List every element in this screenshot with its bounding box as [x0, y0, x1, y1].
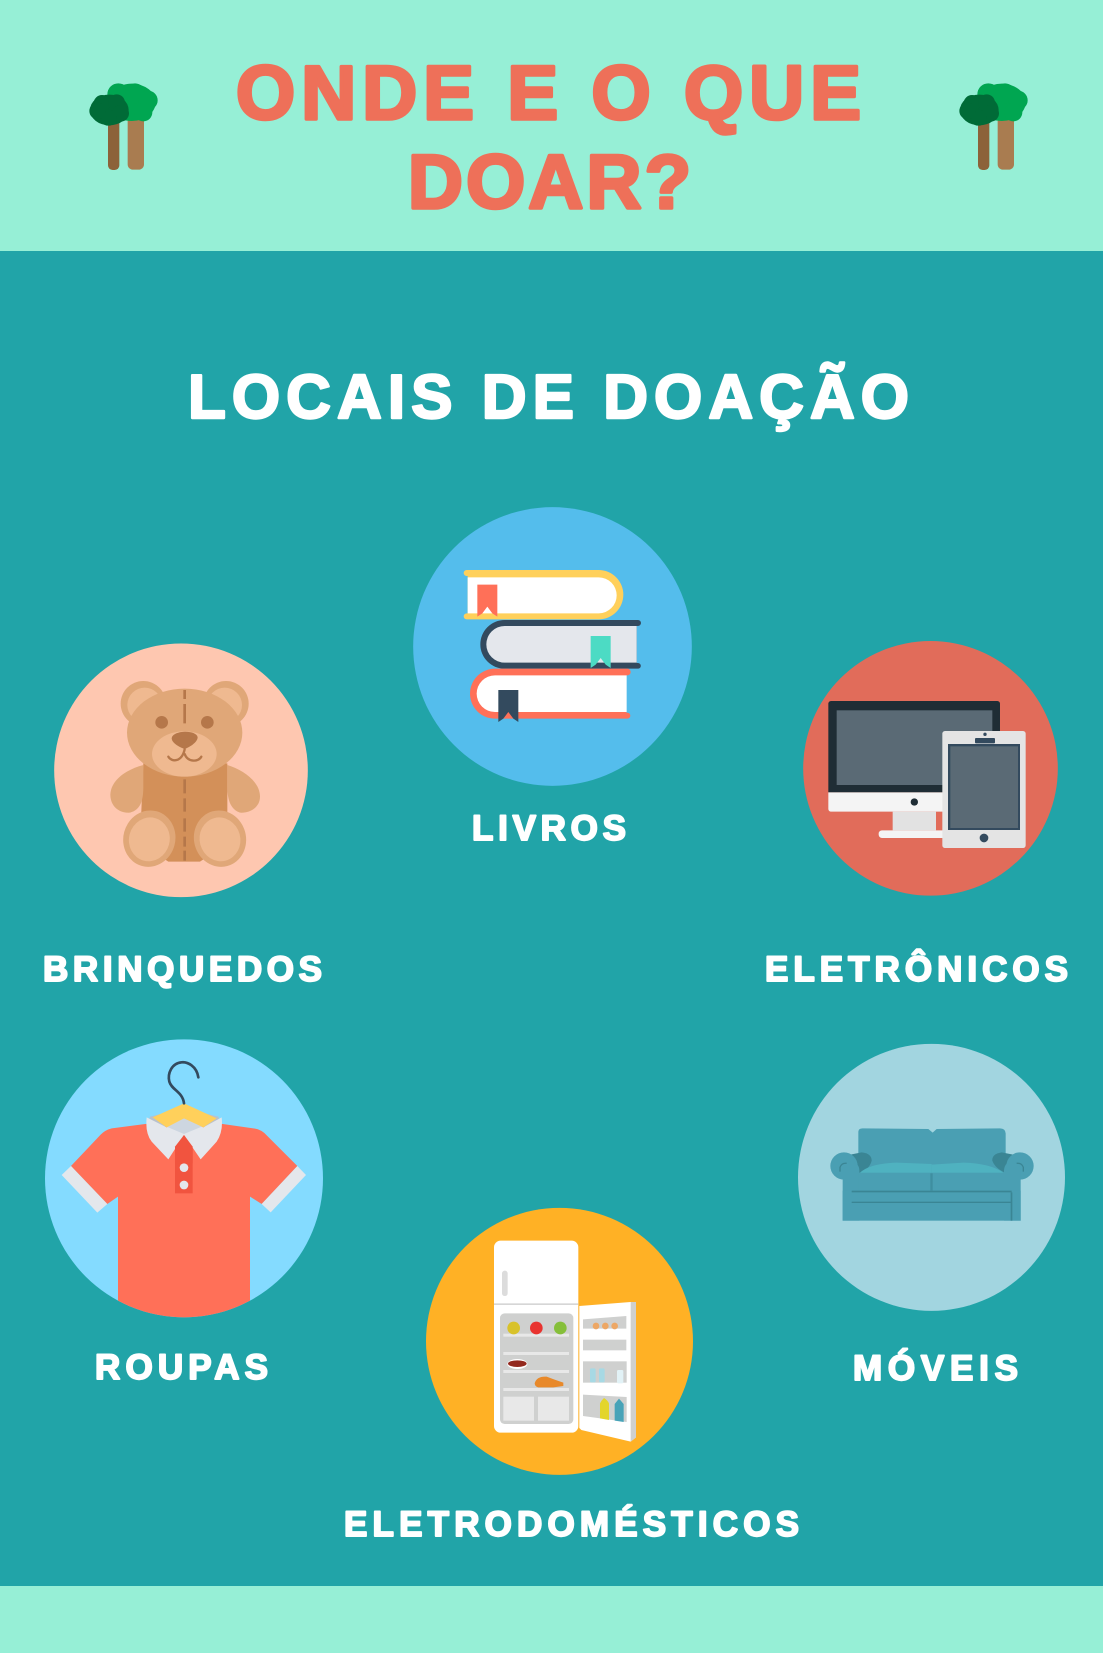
refrigerator body	[494, 1241, 578, 1433]
label: eletrônicos: ELETRÔNICOS	[765, 949, 1068, 989]
label: brinquedos: BRINQUEDOS	[43, 950, 322, 989]
shirt	[62, 1062, 306, 1323]
label: móveis: MÓVEIS	[853, 1348, 1018, 1388]
book: navy	[480, 620, 641, 669]
panel: roupas icon	[45, 1039, 323, 1323]
desktop monitor	[828, 701, 1000, 838]
icon: trees right	[959, 83, 1028, 170]
panel: brinquedos icon	[54, 643, 308, 897]
label: roupas: ROUPAS	[95, 1348, 268, 1387]
panel: eletrônicos icon	[803, 641, 1058, 896]
refrigerator door	[579, 1302, 636, 1442]
label: eletrodomésticos: ELETRODOMÉSTICOS	[344, 1504, 799, 1544]
tablet	[942, 731, 1026, 848]
panel: eletrodomésticos icon	[426, 1208, 693, 1475]
panel: móveis icon	[798, 1044, 1065, 1311]
title: ONDE E O QUE	[236, 51, 861, 136]
title: DOAR?	[408, 140, 691, 225]
panel: livros icon	[413, 507, 692, 786]
book: yellow	[464, 570, 623, 619]
book: red	[470, 669, 631, 722]
label: livros: LIVROS	[472, 809, 626, 848]
heading: locais de doação: LOCAIS DE DOAÇÃO	[188, 363, 909, 432]
teddy bear	[110, 681, 260, 873]
icon: trees left	[89, 83, 158, 170]
title	[236, 51, 861, 225]
sofa	[830, 1128, 1034, 1221]
header band	[0, 0, 1103, 251]
footer band	[0, 1586, 1103, 1653]
